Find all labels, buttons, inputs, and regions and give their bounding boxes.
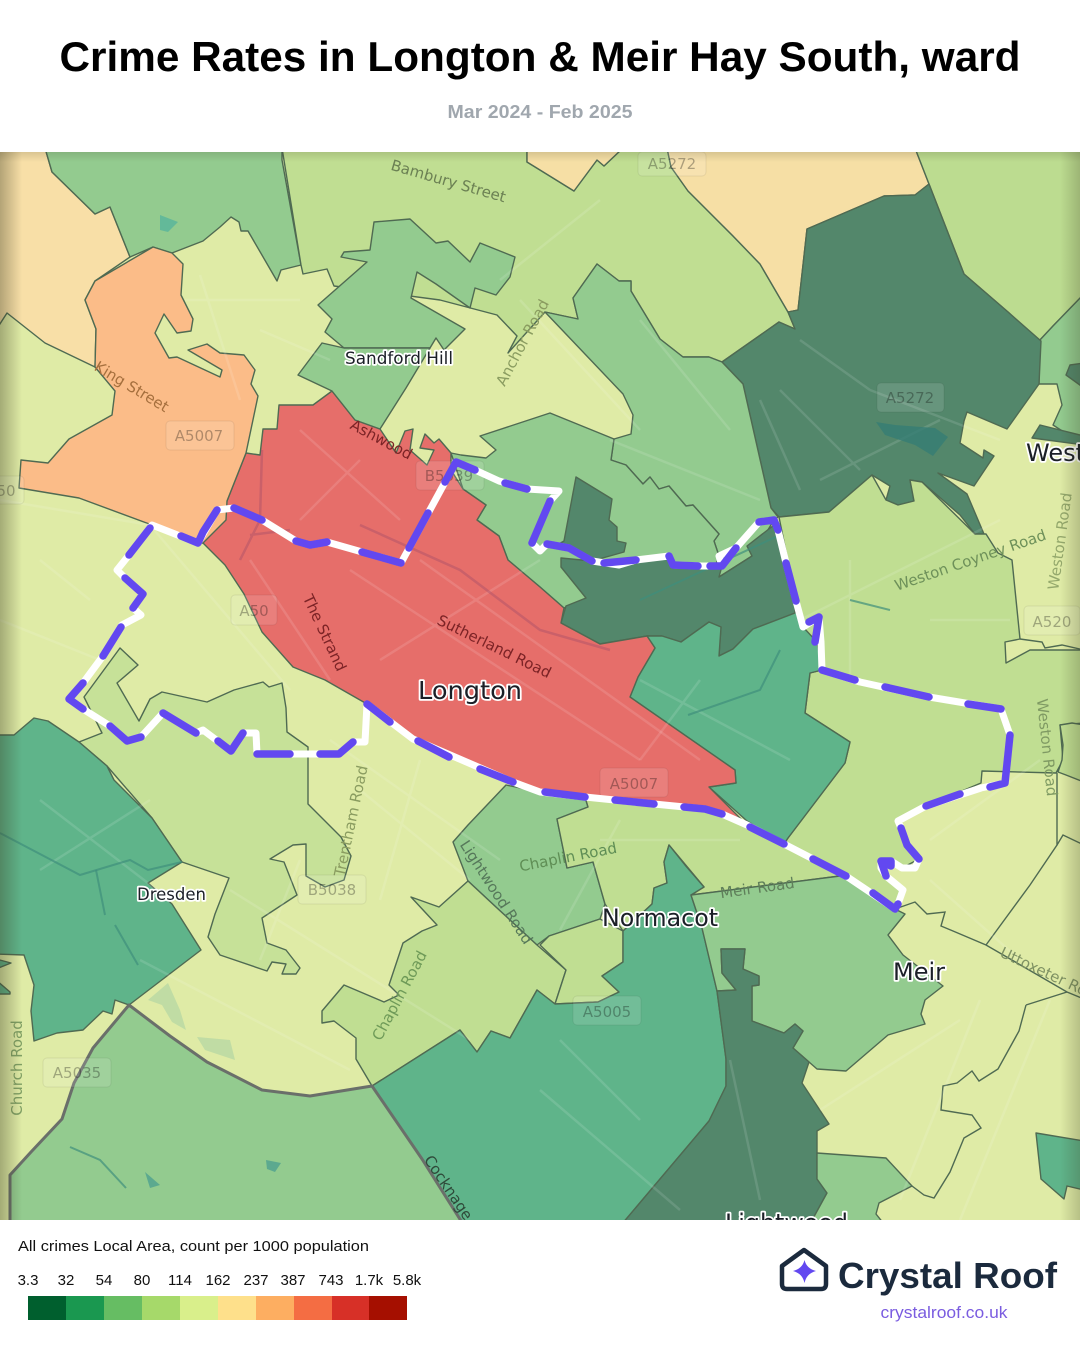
place labels: Lightwood: [725, 1209, 848, 1237]
website url: crystalroof.co.uk: [880, 1304, 1008, 1322]
water features: [145, 215, 948, 1188]
road labels: Church Road: [8, 1020, 26, 1116]
place labels: Normacot: [602, 904, 718, 932]
road labels: Cocknage Road: [420, 1152, 500, 1259]
road number shields: A5007: [610, 775, 658, 793]
road number shields: B5039: [425, 467, 473, 485]
legend value labels: [18, 1272, 422, 1289]
logo wordmark: Crystal Roof: [838, 1255, 1058, 1296]
road labels: Weston Road: [1044, 492, 1076, 591]
legend value labels: 32: [58, 1272, 74, 1289]
road labels: Weston Coyney Road: [892, 526, 1048, 595]
road labels: Bambury Street: [389, 156, 508, 206]
railway line through Longton: [240, 450, 610, 650]
place labels: Dresden: [137, 885, 206, 905]
map areas: crime-rate choropleth: [0, 148, 1080, 1224]
place labels: Meir: [893, 958, 945, 986]
road number shields: A5272: [648, 155, 696, 173]
place labels: Sandford Hill: [345, 349, 453, 369]
legend value labels: 3.3: [18, 1272, 38, 1289]
minor street network: [0, 200, 1050, 1220]
road number shields: A50: [239, 602, 269, 620]
road labels: Chaplin Road: [368, 948, 431, 1044]
legend value labels: 80: [134, 1272, 150, 1289]
legend value labels: 1.7k: [355, 1272, 384, 1289]
legend value labels: 54: [96, 1272, 112, 1289]
road number shields: B5038: [308, 881, 356, 899]
road labels: The Strand: [299, 591, 350, 674]
road labels: Anchor Road: [492, 296, 553, 389]
legend value labels: 5.8k: [393, 1272, 422, 1289]
legend: [18, 1238, 422, 1320]
road labels: Trentham Road: [330, 764, 372, 879]
legend value labels: 743: [318, 1272, 344, 1289]
road labels: Meir Road: [719, 874, 796, 902]
legend value labels: 237: [243, 1272, 269, 1289]
road labels: Ashwood: [347, 416, 415, 463]
road number shields: A5007: [175, 427, 223, 445]
road number shields: A5005: [583, 1003, 631, 1021]
legend title: All crimes Local Area, count per 1000 population: [18, 1238, 369, 1255]
road labels: Sutherland Road: [434, 611, 554, 682]
legend value labels: 162: [205, 1272, 231, 1289]
logo: Crystal Roof: [782, 1250, 1058, 1322]
title: Crime Rates in Longton & Meir Hay South, ward: [60, 33, 1020, 80]
road labels: Chaplin Road: [518, 839, 618, 875]
legend value labels: 114: [168, 1272, 192, 1289]
road number shields: A5272: [886, 389, 934, 407]
subtitle: date range: Mar 2024 - Feb 2025: [448, 102, 632, 122]
map edge shading: [0, 152, 1080, 1220]
road labels: Weston Road: [1033, 698, 1061, 797]
road labels: Lightwood Road: [456, 837, 536, 947]
place labels: Longton: [418, 676, 522, 705]
road labels: King Street: [91, 358, 172, 416]
road number shields: A520: [1033, 613, 1071, 631]
legend value labels: 387: [280, 1272, 306, 1289]
icon: house with star: [782, 1250, 826, 1289]
road number shields: [0, 152, 1080, 1087]
boundary lines between pale areas: [895, 639, 1080, 1198]
place labels: [137, 349, 1080, 1237]
ward boundary dashed outline: [69, 462, 1010, 909]
road number shields: A5035: [53, 1064, 101, 1082]
legend colour scale: [28, 1296, 407, 1320]
